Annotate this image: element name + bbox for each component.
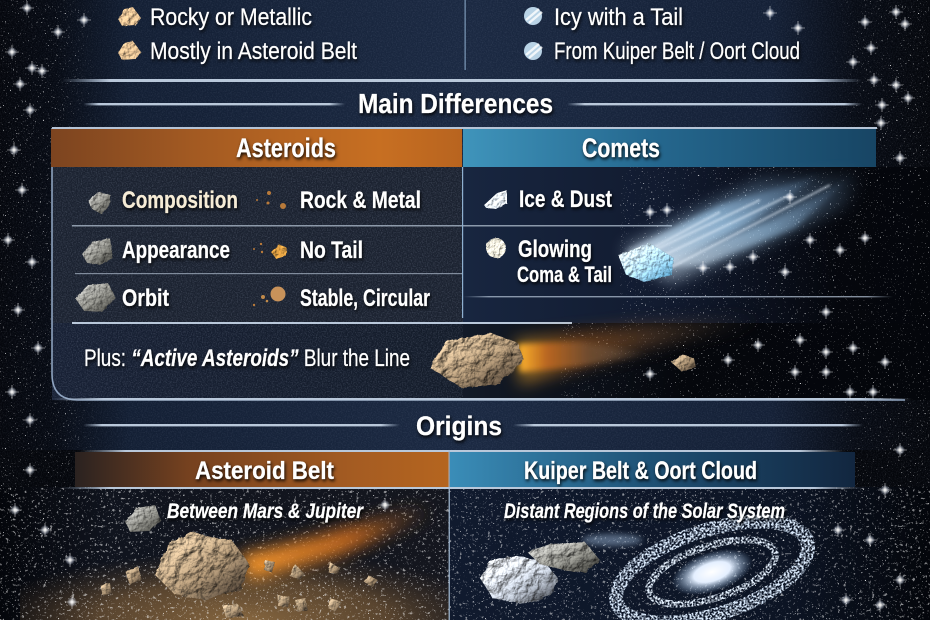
section rule	[62, 79, 862, 82]
header: kuiper belt and oort cloud: Kuiper Belt & Oort Cloud	[524, 457, 757, 485]
heading: main differences: Main Differences	[358, 88, 553, 119]
value: no tail: No Tail	[300, 237, 363, 264]
row: appearance	[82, 237, 363, 265]
icon: rock bullet	[118, 41, 141, 60]
text: distant regions: Distant Regions of the Solar System	[504, 500, 785, 523]
beam: orange dust stream	[238, 505, 430, 580]
divider between top columns	[465, 0, 466, 70]
icon: second icy rock	[527, 542, 600, 572]
icon: ice ball bullet	[524, 42, 542, 60]
icon: tan rock with specks	[253, 243, 287, 259]
panel: origins kuiper belt and oort cloud	[449, 443, 930, 620]
icon: ice ball bullet	[524, 7, 542, 25]
panel: origins asteroid belt	[0, 452, 449, 620]
text: between mars and jupiter: Between Mars & Jupiter	[167, 500, 364, 523]
panel: main differences table	[51, 127, 930, 400]
value: stable circular: Stable, Circular	[300, 285, 430, 312]
row: glowing coma and tail	[486, 236, 612, 287]
text: rocky or metallic: Rocky or Metallic	[150, 4, 312, 31]
header: asteroid belt	[75, 452, 449, 487]
header: comets	[463, 129, 876, 167]
top comparison: asteroids bullets	[118, 4, 357, 65]
icon: ice chunk	[484, 190, 507, 209]
icon: large grey rock	[75, 283, 116, 312]
row: ice and dust	[484, 186, 612, 213]
icon: pale rock	[486, 238, 506, 258]
header: asteroid belt: Asteroid Belt	[195, 457, 335, 485]
value: glowing: Glowing	[518, 236, 592, 263]
icon: big boulder	[155, 532, 250, 600]
text: active asteroids callout: Plus: “Active Asteroids” Blur the Line	[84, 345, 410, 372]
label: composition: Composition	[122, 187, 238, 214]
illustration: comet with tail	[618, 172, 872, 282]
illustration: spiral galaxy	[582, 501, 820, 620]
icon: tan rock with trail	[253, 286, 286, 306]
header: comets: Comets	[582, 133, 660, 163]
icon: rock bullet	[118, 7, 141, 26]
header: asteroids	[51, 129, 462, 167]
text: from kuiper belt: From Kuiper Belt / Oort Cloud	[554, 38, 800, 65]
starfield: outer margins	[0, 0, 930, 487]
header: asteroids: Asteroids	[236, 133, 336, 163]
heading: origins: Origins	[416, 411, 502, 441]
icon: large icy rock	[480, 555, 558, 604]
label: appearance: Appearance	[122, 237, 230, 264]
value: rock and metal: Rock & Metal	[300, 187, 421, 214]
top comparison: comets bullets	[524, 4, 800, 65]
illustration: active asteroid with fiery tail	[430, 305, 892, 399]
text: icy with a tail: Icy with a Tail	[554, 4, 683, 31]
text: mostly in asteroid belt: Mostly in Asteroid Belt	[150, 38, 357, 65]
row: orbit	[75, 283, 430, 312]
icon: small rock	[125, 505, 161, 532]
small rocks	[100, 560, 378, 618]
value: coma and tail: Coma & Tail	[517, 262, 612, 287]
icon: small rock	[671, 354, 696, 372]
icon: metal specks	[256, 191, 286, 209]
header: kuiper belt and oort cloud	[450, 452, 855, 487]
panel frame	[52, 128, 905, 400]
icon: dark rock	[88, 192, 111, 214]
value: ice and dust: Ice & Dust	[519, 186, 612, 213]
label: orbit: Orbit	[122, 285, 169, 312]
row: composition	[88, 187, 421, 214]
icon: grey rock	[82, 238, 113, 265]
origins frame lines	[62, 450, 862, 620]
